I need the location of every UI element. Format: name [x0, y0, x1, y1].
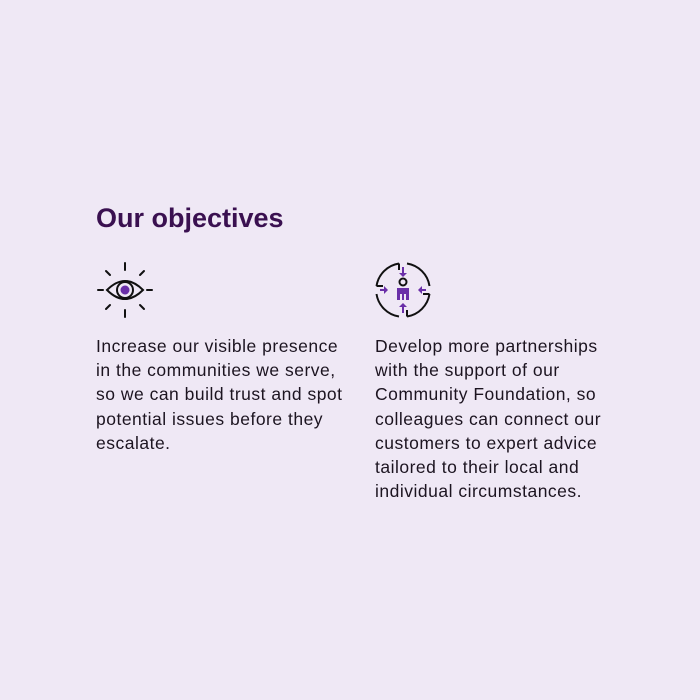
icon: person with arrows	[376, 262, 430, 318]
text: objective 2: tailored to their local and	[375, 457, 579, 477]
text: objective 2: Community Foundation, so	[375, 384, 596, 404]
text: objective 1	[96, 336, 343, 453]
text: objective 1: in the communities we serve,	[96, 360, 336, 380]
icon: eye	[97, 262, 153, 318]
text: objective 2: with the support of our	[375, 360, 560, 380]
text: objective 2: Develop more partnerships	[375, 336, 598, 356]
text: objective 1: so we can build trust and spot	[96, 384, 343, 404]
title: Our objectives	[96, 203, 284, 233]
text: objective 1: escalate.	[96, 433, 171, 453]
text: objective 1: potential issues before they	[96, 409, 323, 429]
text: objective 2: colleagues can connect our	[375, 409, 601, 429]
text: objective 2: customers to expert advice	[375, 433, 597, 453]
text: objective 1: Increase our visible presence	[96, 336, 338, 356]
text: objective 2: individual circumstances.	[375, 481, 582, 501]
text: objective 2	[375, 336, 601, 501]
